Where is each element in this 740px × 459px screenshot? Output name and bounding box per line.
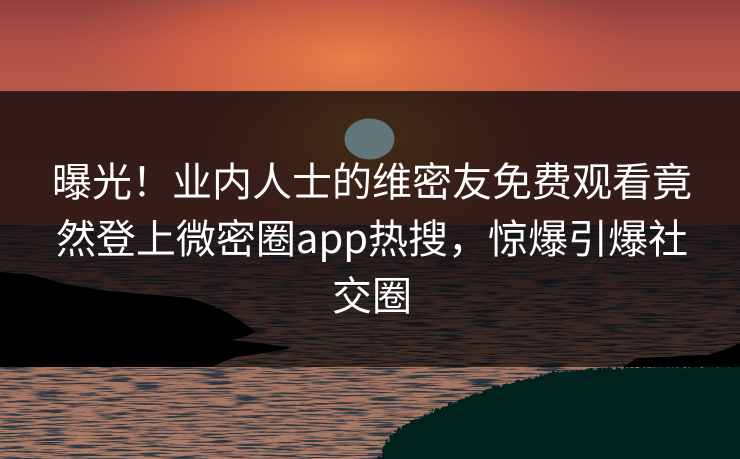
title: 然登上微密圈app热搜，惊爆引爆社 [56,207,688,265]
sea [0,225,740,459]
sky [0,0,740,226]
title [52,150,692,322]
left headland [0,272,292,367]
far right headland [623,343,740,367]
title: 交圈 [332,264,412,322]
title: 曝光！业内人士的维密友免费观看竟 [52,150,692,208]
sun [344,118,394,160]
right foreground headland [377,366,740,459]
